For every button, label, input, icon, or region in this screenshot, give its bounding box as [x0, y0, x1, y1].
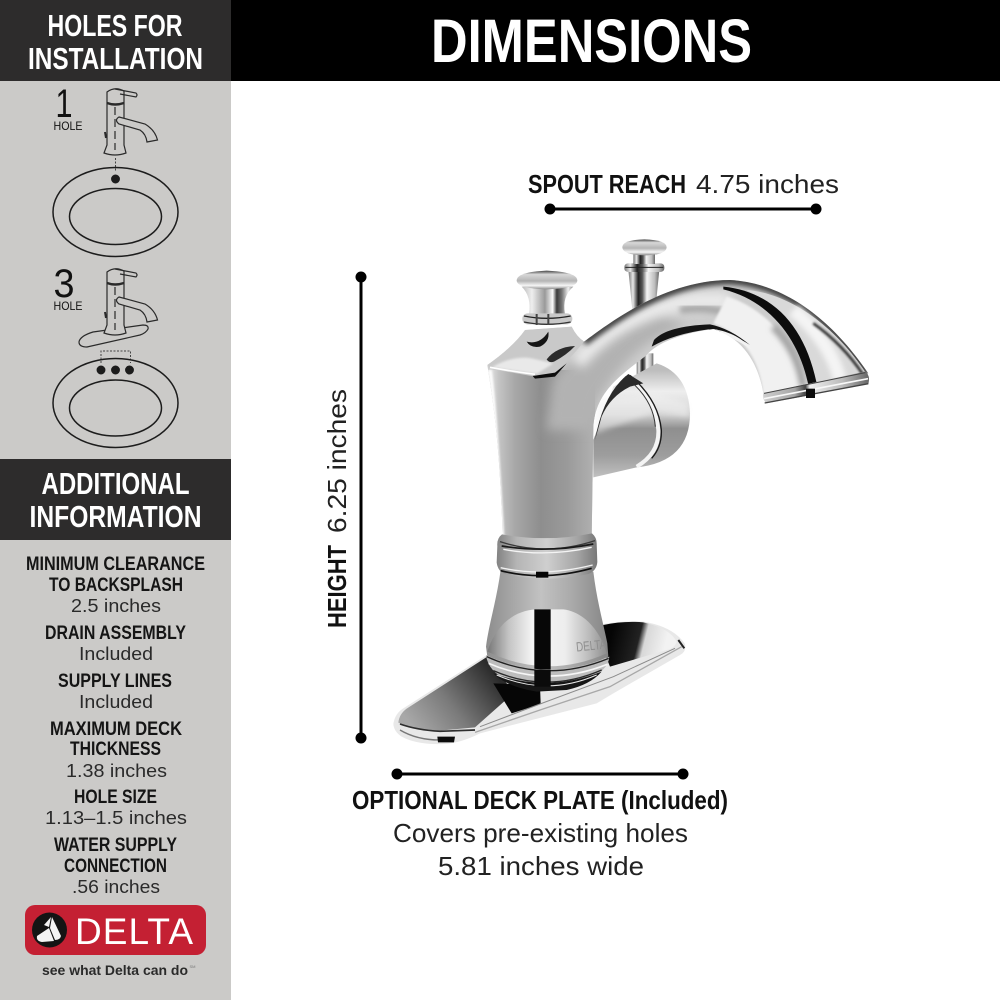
text block: supply lines: SUPPLY LINES — [58, 671, 172, 692]
number: 3 hole label — [54, 262, 82, 313]
flared base: DELTA — [575, 637, 607, 655]
diagram: three hole installation — [53, 262, 178, 448]
number: 1 hole label: HOLE — [54, 119, 82, 133]
illustration: chrome faucet — [393, 239, 880, 744]
text block: maximum deck thickness — [50, 719, 182, 781]
text block: hole size: 1.13–1.5 inches — [45, 808, 187, 828]
text block: drain assembly: Included — [79, 644, 153, 664]
text block: water supply connection: .56 inches — [72, 877, 160, 897]
logo: delta: DELTA — [75, 911, 193, 952]
panel: left sidebar background — [0, 0, 231, 1000]
logo: delta: see what Delta can do — [42, 963, 188, 978]
dimension: height: HEIGHT — [322, 545, 352, 628]
header: holes for installation: HOLES FOR — [48, 8, 182, 43]
number: 1 hole label: 1 — [56, 82, 72, 126]
icon: three hole sink — [53, 358, 178, 448]
dimension: spout reach — [528, 169, 839, 214]
dimension: spout reach: 4.75 inches — [696, 169, 839, 199]
text block: supply lines: Included — [79, 692, 153, 712]
text block: maximum deck thickness: MAXIMUM DECK — [50, 719, 182, 740]
header: holes for installation — [0, 0, 231, 81]
header: additional information: INFORMATION — [30, 499, 202, 534]
dimension: spout reach: SPOUT REACH — [528, 169, 686, 199]
text block: minimum clearance: TO BACKSPLASH — [49, 575, 183, 596]
text block: minimum clearance: 2.5 inches — [71, 596, 161, 616]
icon: one hole sink — [53, 168, 178, 256]
text block: maximum deck thickness: 1.38 inches — [66, 761, 167, 781]
text block: drain assembly — [45, 623, 186, 664]
faucet lower part — [393, 533, 685, 744]
dimension: height: 6.25 inches — [322, 389, 352, 533]
faucet upper part — [480, 239, 880, 543]
text block: supply lines — [58, 671, 172, 712]
flared base — [486, 570, 609, 692]
spout and body shell — [480, 273, 880, 543]
dimension: optional deck plate: 5.81 inches wide — [438, 851, 644, 881]
text block: water supply connection — [54, 835, 177, 897]
number: 1 hole label — [54, 82, 82, 133]
logo: delta — [25, 905, 206, 978]
shoulder — [487, 327, 584, 377]
header: holes for installation: INSTALLATION — [28, 41, 203, 76]
text block: hole size: HOLE SIZE — [74, 787, 157, 808]
text block: hole size — [45, 787, 187, 828]
black stripe — [723, 287, 817, 385]
title bar: dimensions — [231, 0, 1000, 81]
text block: drain assembly: DRAIN ASSEMBLY — [45, 623, 186, 644]
side valve cylinder — [593, 363, 690, 477]
spout bell light side — [713, 297, 808, 395]
icon: delta emblem — [32, 912, 67, 948]
rear lift rod — [622, 239, 667, 378]
dimension: optional deck plate — [352, 768, 728, 881]
text block: water supply connection: CONNECTION — [64, 856, 167, 877]
spout shading: neck grey — [547, 313, 687, 430]
dimension: optional deck plate: Covers pre-existing holes — [393, 818, 688, 848]
number: 3 hole label: 3 — [54, 262, 74, 306]
text block: minimum clearance: MINIMUM CLEARANCE — [26, 554, 205, 575]
diagram: one hole installation — [53, 82, 178, 256]
spout aerator rim — [763, 372, 869, 403]
icon: three hole faucet with plate — [79, 269, 158, 347]
dimension: optional deck plate: OPTIONAL DECK PLATE (Included) — [352, 785, 728, 815]
icon: connector line — [114, 158, 116, 172]
icon: dotted connector — [101, 351, 130, 363]
base collar ring — [497, 533, 597, 579]
header: additional information — [0, 459, 231, 540]
spout bell right side — [747, 290, 868, 387]
logo: delta: SM — [190, 964, 196, 969]
header: additional information: ADDITIONAL — [42, 466, 190, 501]
underside reflection — [652, 324, 750, 347]
title bar: dimensions: DIMENSIONS — [431, 7, 752, 75]
dimension: height — [322, 272, 366, 744]
deck plate — [393, 621, 685, 744]
icon: single hole faucet — [104, 89, 158, 155]
text block: maximum deck thickness: THICKNESS — [70, 739, 161, 760]
number: 3 hole label: HOLE — [54, 299, 82, 313]
text block: water supply connection: WATER SUPPLY — [54, 835, 177, 856]
handle knob — [517, 271, 577, 325]
text block: minimum clearance — [26, 554, 205, 616]
